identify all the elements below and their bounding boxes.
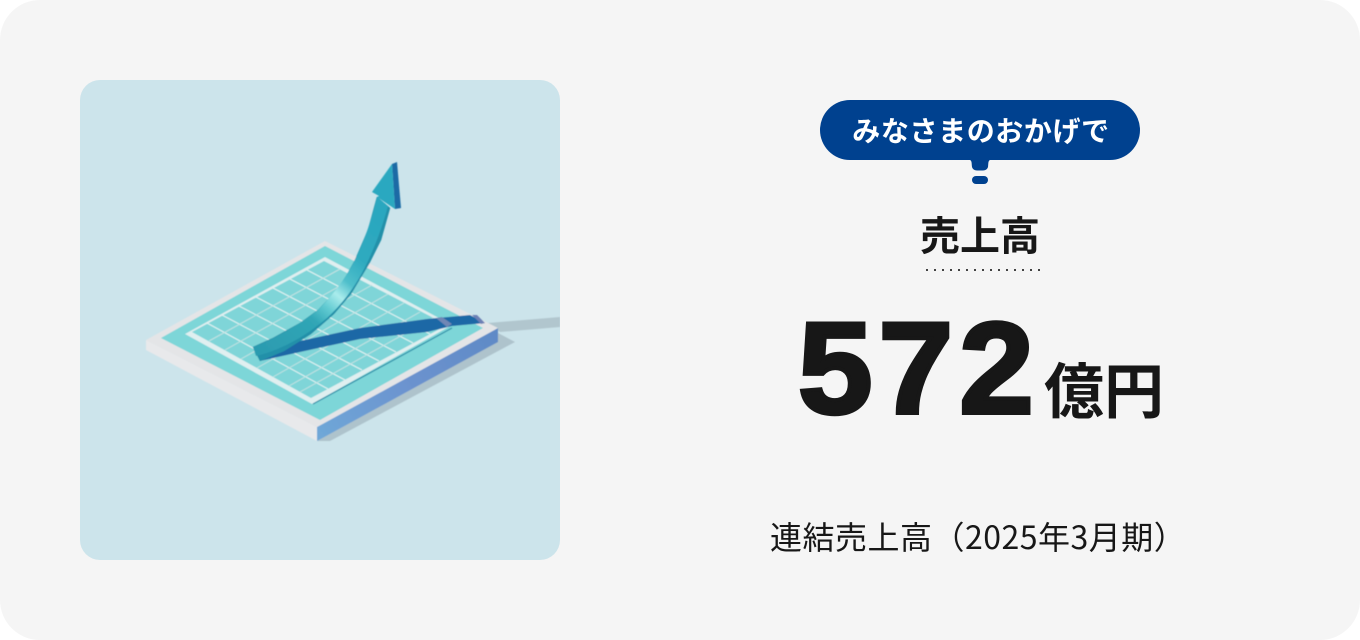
board drop shadow bbox=[317, 333, 515, 441]
grid lines bbox=[207, 269, 433, 392]
speech bubble badge bbox=[820, 100, 1140, 184]
number 572: 572 bbox=[798, 295, 1040, 441]
shadow crossing frame bbox=[436, 317, 452, 327]
bubble pill bbox=[820, 100, 1140, 160]
unit: 億円 bbox=[1044, 344, 1164, 431]
shadow crossing board edge bbox=[472, 315, 485, 324]
board side left bbox=[146, 340, 317, 441]
arrow body dark underside bbox=[253, 197, 390, 361]
arrow shadow on board bbox=[260, 315, 485, 361]
grid field bbox=[192, 261, 447, 398]
arrow head bbox=[372, 164, 395, 209]
arrow head side bbox=[392, 162, 401, 209]
board top bbox=[146, 241, 498, 427]
frame dark edge bbox=[313, 328, 452, 404]
big value bbox=[798, 295, 1164, 441]
dotted underline bbox=[926, 269, 1042, 271]
far wall shadow bbox=[488, 317, 560, 332]
bubble text: みなさまのおかげで bbox=[852, 110, 1110, 150]
illustration background bbox=[80, 80, 560, 560]
board side right bbox=[317, 328, 498, 441]
white frame bbox=[185, 257, 452, 404]
teal inner panel bbox=[161, 246, 483, 420]
illustration: growth arrow on grid board bbox=[80, 80, 560, 560]
heading: 売上高 bbox=[920, 204, 1040, 262]
arrow body bbox=[253, 197, 388, 356]
caption: 連結売上高（2025年3月期） bbox=[770, 513, 1186, 559]
bubble tail bbox=[970, 160, 990, 184]
